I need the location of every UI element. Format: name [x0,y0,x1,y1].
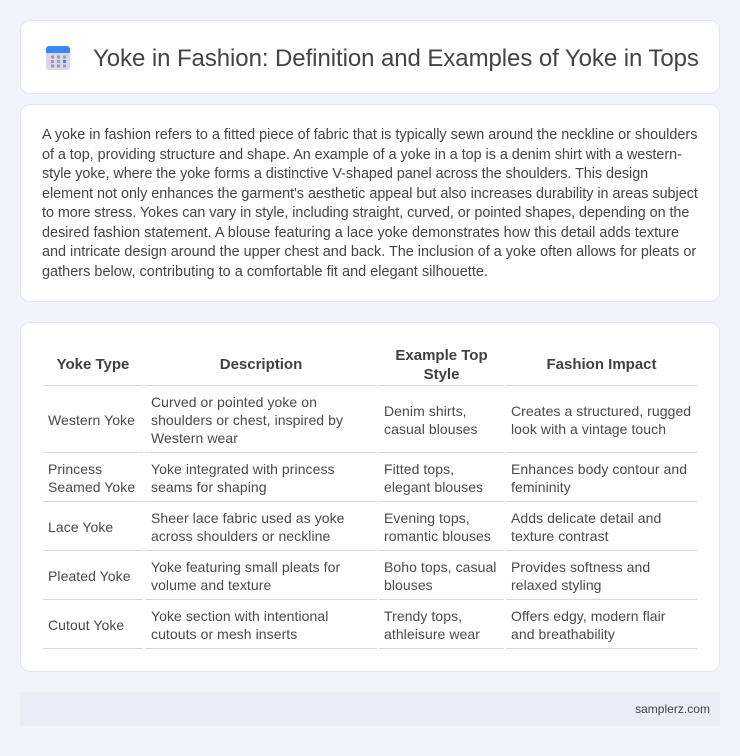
row 5 example: Trendy tops, [384,608,462,624]
row 1 example: Denim shirts, [384,403,467,419]
table header: example top style: Style [424,366,459,382]
row 2 description [151,461,335,495]
row 2: princess seamed yoke [48,461,135,495]
table header: description: Description [220,356,302,373]
intro paragraph: desired fashion statement. A blouse featuring a lace yoke demonstrates how this detail adds texture [42,224,679,240]
row 3 description: Sheer lace fabric used as yoke [151,510,345,526]
row 5 impact [511,608,666,642]
row 4 example [384,559,496,593]
row 3 impact [511,510,661,544]
intro paragraph: of a top, providing structure and shape. An example of a yoke in a top is a denim shirt with a western- [42,146,682,162]
intro paragraph [42,127,698,280]
row 4 description: volume and texture [151,577,271,593]
row 3 example [384,510,491,544]
footer bar [20,692,720,726]
row 2 example [384,461,483,495]
intro paragraph: gathers below, contributing to a comfortable fit and elegant silhouette. [42,264,488,280]
row 3 description [151,510,345,544]
table header: yoke type: Yoke Type [57,356,129,373]
row 4 impact [511,559,650,593]
row 1 description [151,394,343,446]
row 1 impact: Creates a structured, rugged [511,403,691,419]
row 5 description: cutouts or mesh inserts [151,626,297,642]
row 3 impact: texture contrast [511,528,609,544]
intro paragraph: to more stress. Yokes can vary in style, including straight, curved, or pointed shapes, depending on the [42,205,689,221]
table header: fashion impact: Fashion Impact [546,356,657,373]
row 5 example [384,608,480,642]
row 5 example: athleisure wear [384,626,480,642]
row 2 impact: Enhances body contour and [511,461,687,477]
intro panel [20,104,720,302]
row 3 example: Evening tops, [384,510,470,526]
row 4 impact: Provides softness and [511,559,650,575]
row 3 example: romantic blouses [384,528,491,544]
row 4 description: Yoke featuring small pleats for [151,559,340,575]
row 5 impact: Offers edgy, modern flair [511,608,666,624]
row 4 description [151,559,340,593]
row 4 impact: relaxed styling [511,577,602,593]
row 2 impact [511,461,687,495]
row 2 example: elegant blouses [384,479,483,495]
row 1 description: shoulders or chest, inspired by [151,412,343,428]
row 1 example: casual blouses [384,421,478,437]
row 4 example: blouses [384,577,433,593]
intro paragraph: A yoke in fashion refers to a fitted piece of fabric that is typically sewn around the neckline or shoulders [42,127,697,143]
row 4 example: Boho tops, casual [384,559,496,575]
row 5 impact: and breathability [511,626,615,642]
row 5: cutout yoke: Cutout Yoke [48,617,124,633]
row 1: western yoke: Western Yoke [48,412,135,428]
row 1 impact [511,403,691,437]
title: Yoke in Fashion: Definition and Examples of Yoke in Tops [93,45,699,72]
row 3 description: across shoulders or neckline [151,528,330,544]
table header: example top style [395,347,488,382]
footer text: samplerz.com [635,702,710,716]
row 2 example: Fitted tops, [384,461,454,477]
row 2: princess seamed yoke: Seamed Yoke [48,479,135,495]
row 5 description [151,608,328,642]
row 3 impact: Adds delicate detail and [511,510,661,526]
row 2 description: seams for shaping [151,479,267,495]
header panel [20,20,720,94]
intro paragraph: element not only enhances the garment's aesthetic appeal but also increases durability in areas subject [42,186,698,202]
intro paragraph: style yoke, where the yoke forms a distinctive V-shaped panel across the shoulders. This design [42,166,648,182]
row 2 description: Yoke integrated with princess [151,461,335,477]
row 1 impact: look with a vintage touch [511,421,666,437]
table panel [20,322,720,672]
row 3: lace yoke: Lace Yoke [48,519,113,535]
row 1 description: Curved or pointed yoke on [151,394,317,410]
row 4: pleated yoke: Pleated Yoke [48,568,131,584]
row 5 description: Yoke section with intentional [151,608,328,624]
row 2 impact: femininity [511,479,571,495]
row 1 description: Western wear [151,430,238,446]
icon: calendar [46,46,70,70]
row 2: princess seamed yoke: Princess [48,461,102,477]
row 1 example [384,403,478,437]
table header: example top style: Example Top [395,347,488,364]
intro paragraph: and intricate design around the upper chest and back. The inclusion of a yoke often allows for pleats or [42,244,696,260]
